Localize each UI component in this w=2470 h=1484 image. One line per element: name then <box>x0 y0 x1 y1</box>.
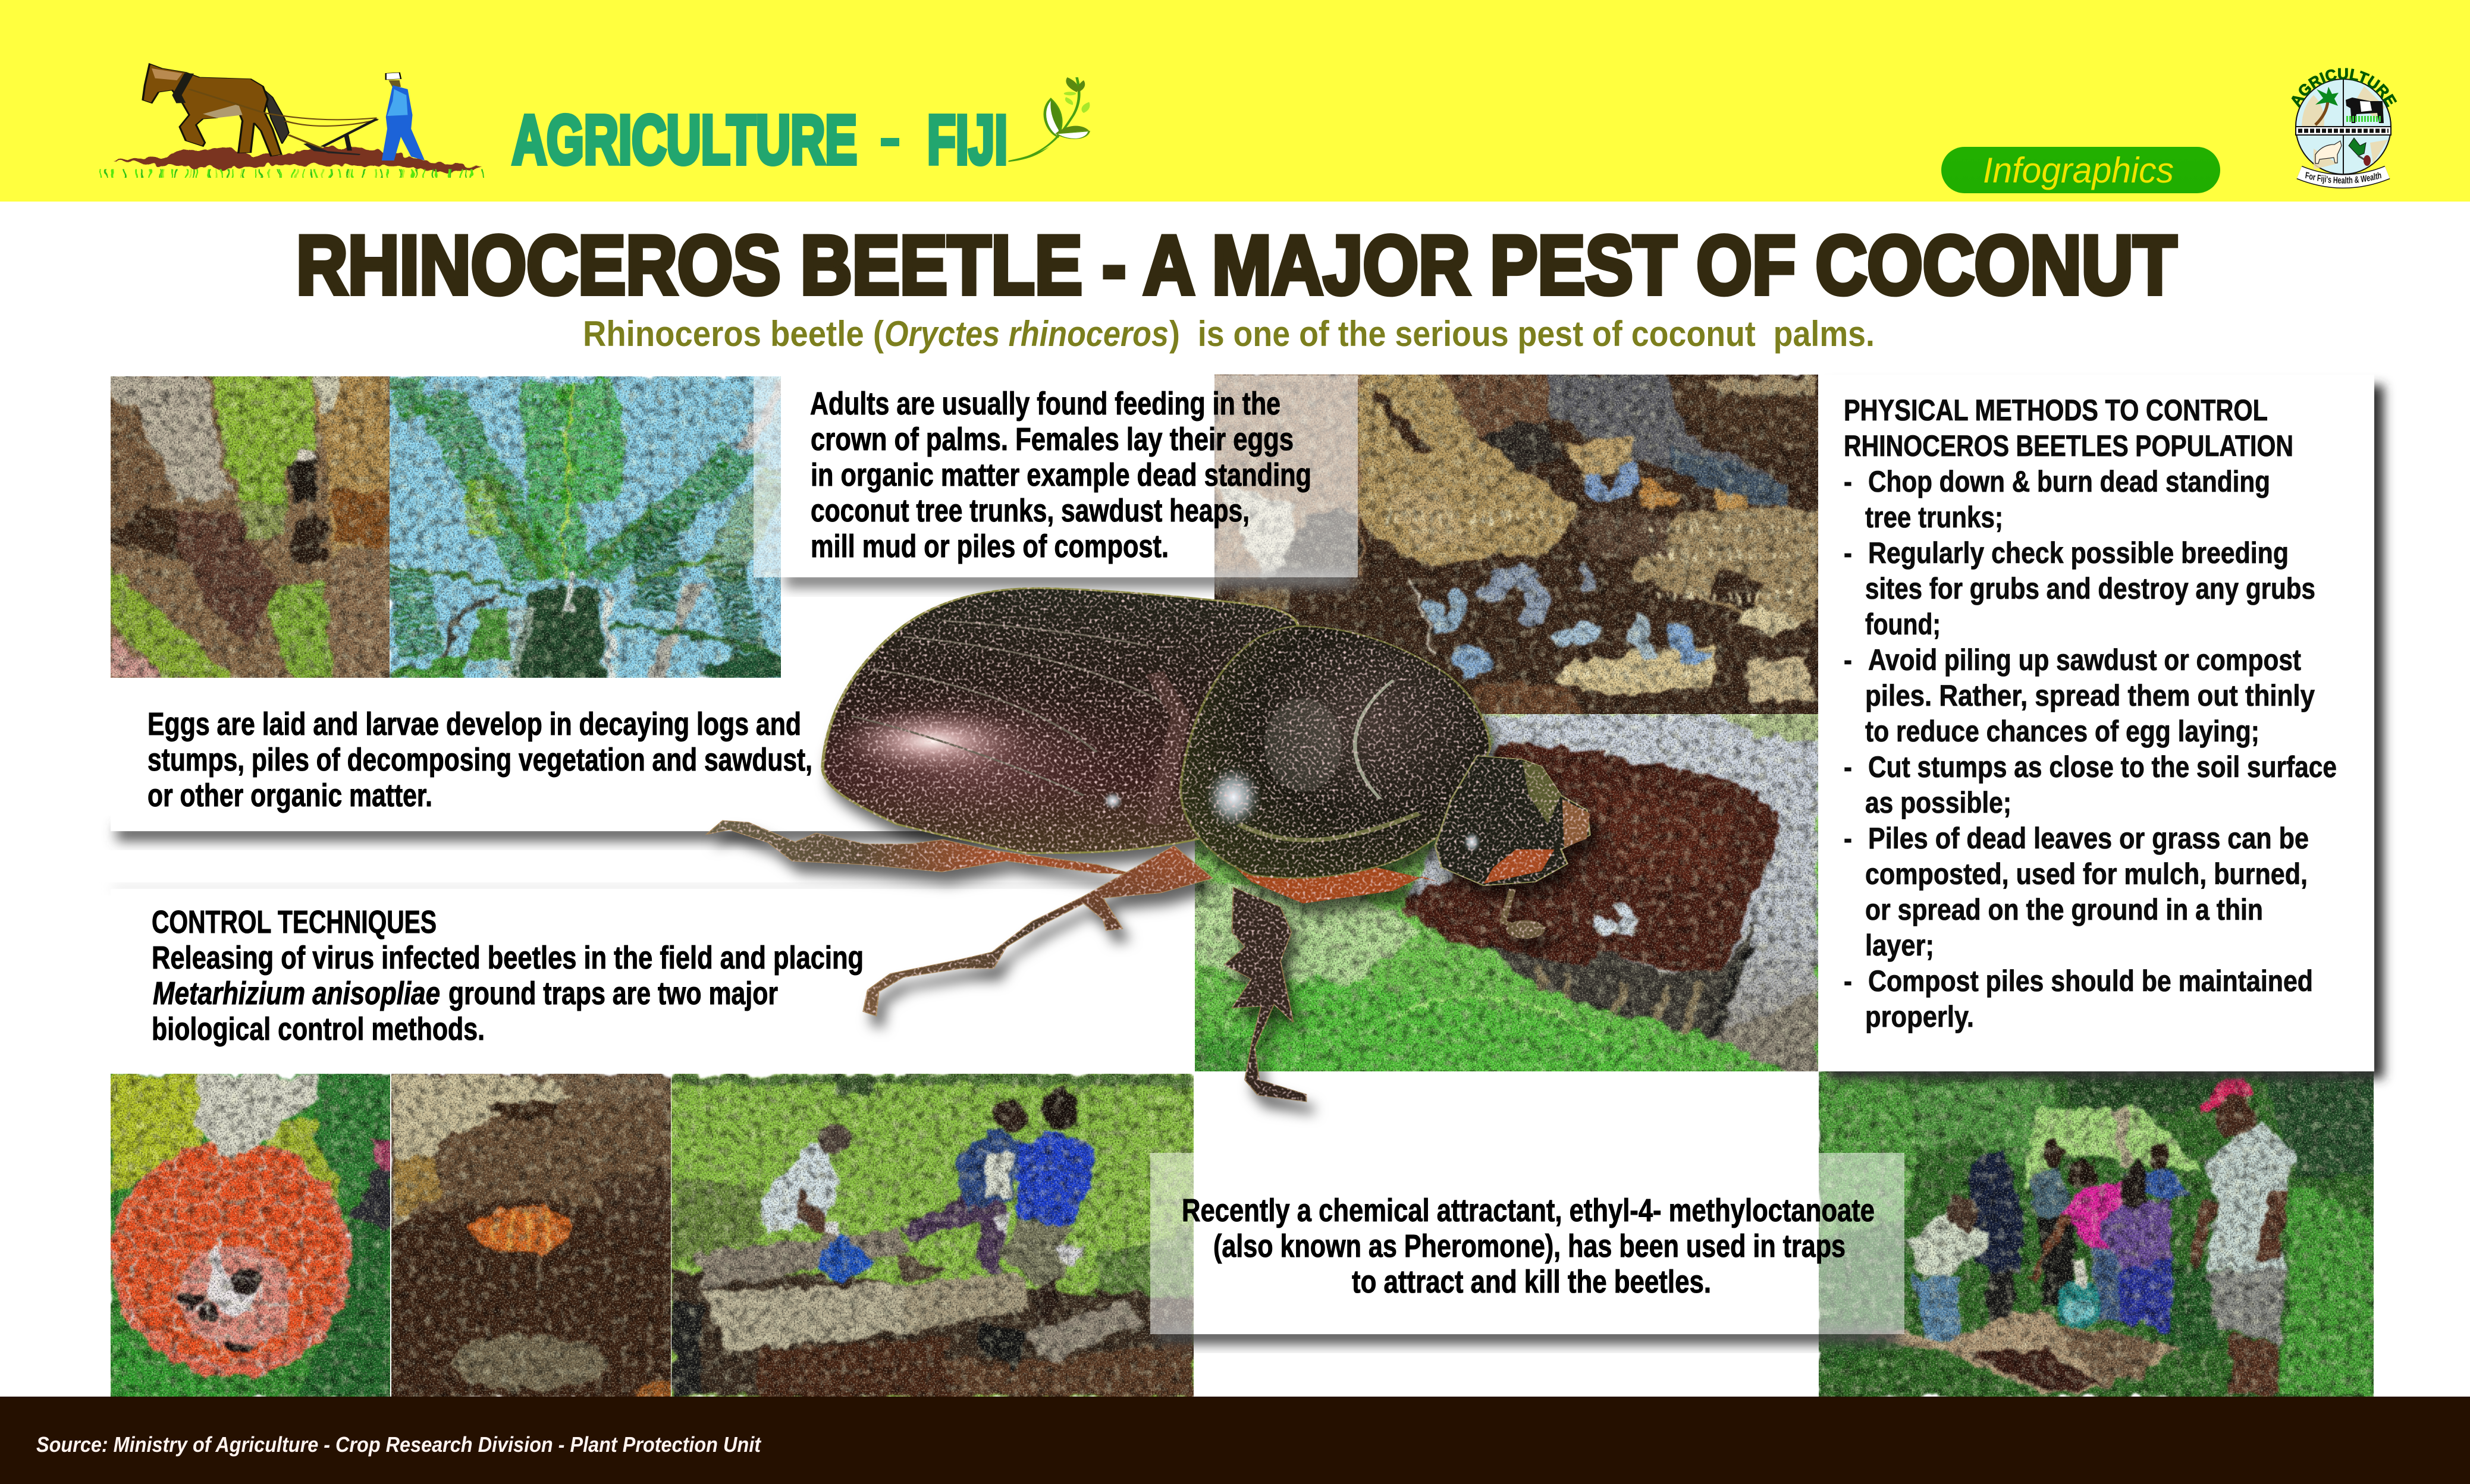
photo: coconut palm crown against sky <box>387 375 788 681</box>
photo: grubs in sawdust <box>1206 371 1832 719</box>
text block: physical methods to control population <box>1844 394 2337 1033</box>
text block: physical methods to control population: Compost piles should be maintained <box>1868 964 2313 998</box>
emblem taro plant <box>2349 138 2371 166</box>
logo: horse and ploughman illustration <box>101 64 493 177</box>
beetle front leg <box>1225 887 1306 1102</box>
text block: physical methods to control population: Chop down & burn dead standing <box>1868 465 2270 498</box>
beetle head <box>1435 756 1590 885</box>
text box: adults feeding and egg laying: in organic matter example dead standing <box>811 457 1311 493</box>
beetle pronotum <box>1181 626 1490 878</box>
text block: physical methods to control population: PHYSICAL METHODS TO CONTROL <box>1844 394 2268 427</box>
text box: control techniques: CONTROL TECHNIQUES <box>152 904 437 940</box>
text block: physical methods to control population: or spread on the ground in a thin <box>1865 893 2263 926</box>
text block: physical methods to control population: - <box>1844 964 1852 998</box>
text block: physical methods to control population: - <box>1844 643 1852 677</box>
text block: physical methods to control population: - <box>1844 750 1852 784</box>
text box: adults feeding and egg laying: crown of palms. Females lay their eggs <box>811 422 1294 457</box>
icon: leaf sprig <box>1009 77 1090 162</box>
subtitle: ) is one of the serious pest of coconut palms. <box>1169 314 1875 354</box>
text box: eggs and larvae habitat: stumps, piles of decomposing vegetation and sawdust, <box>147 742 812 778</box>
shadow and white panel: physical methods <box>1819 375 2384 1079</box>
emblem palm <box>2315 87 2339 125</box>
subtitle <box>583 314 1875 354</box>
text box: pheromone attractant: Recently a chemical attractant, ethyl-4- methyloctanoate <box>1182 1193 1875 1228</box>
text box: adults feeding and egg laying <box>754 375 1358 587</box>
text block: physical methods to control population: piles. Rather, spread them out thinly <box>1865 679 2315 712</box>
footer bar <box>0 1397 2470 1484</box>
photo: damaged coconut frond <box>111 376 390 678</box>
beetle hind leg <box>707 820 1135 875</box>
text box: eggs and larvae habitat <box>111 680 1074 841</box>
rhinoceros beetle <box>707 588 1590 1102</box>
text box: control techniques: biological control methods. <box>152 1011 485 1047</box>
text block: physical methods to control population: Avoid piling up sawdust or compost <box>1868 643 2301 677</box>
text box: control techniques: Metarhizium anisopliae <box>153 976 440 1011</box>
source text: Source: Ministry of Agriculture - Crop Research Division - Plant Protection Unit <box>36 1432 762 1457</box>
subtitle: Oryctes rhinoceros <box>884 314 1169 354</box>
text box: pheromone attractant: (also known as Pheromone), has been used in traps <box>1213 1228 1846 1264</box>
text box: adults feeding and egg laying: mill mud or piles of compost. <box>811 529 1169 564</box>
emblem: Ministry of Agriculture crest <box>2291 68 2397 188</box>
text box: control techniques: ground traps are two major <box>448 976 778 1011</box>
photo: hollow log with grub on grass <box>1189 711 1826 1077</box>
text box: control techniques <box>111 886 1194 1074</box>
infographics pill badge: Infographics <box>1983 150 2174 190</box>
text block: physical methods to control population: - <box>1844 465 1852 498</box>
text block: physical methods to control population: composted, used for mulch, burned, <box>1865 857 2308 891</box>
text box: control techniques: Releasing of virus infected beetles in the field and placing <box>152 940 864 976</box>
text block: physical methods to control population: as possible; <box>1865 786 2011 819</box>
emblem ribbon motto: For Fiji's Health & Wealth <box>2305 172 2381 184</box>
text block: physical methods to control population: to reduce chances of egg laying; <box>1865 715 2259 748</box>
brand name: AGRICULTURE - FIJI: AGRICULTURE <box>512 101 857 178</box>
text box: eggs and larvae habitat: Eggs are laid and larvae develop in decaying logs and <box>147 706 801 742</box>
text block: physical methods to control population: layer; <box>1865 929 1934 962</box>
infographics pill badge <box>1941 147 2220 193</box>
title: RHINOCEROS BEETLE - A MAJOR PEST OF COCONUT <box>296 218 2177 312</box>
emblem arc title: AGRICULTURE <box>2291 68 2397 108</box>
beetle antenna <box>1503 889 1545 929</box>
text box: eggs and larvae habitat: or other organic matter. <box>147 778 432 813</box>
text block: physical methods to control population: Piles of dead leaves or grass can be <box>1868 822 2309 855</box>
text block: physical methods to control population: Cut stumps as close to the soil surface <box>1868 750 2337 784</box>
text block: physical methods to control population: - <box>1844 822 1852 855</box>
emblem sheep <box>2315 141 2342 164</box>
header band <box>0 0 2470 202</box>
text block: physical methods to control population: properly. <box>1865 1000 1974 1033</box>
text block: physical methods to control population: found; <box>1865 608 1941 641</box>
photo: officers pouring attractant into log <box>1816 1070 2378 1400</box>
text box: pheromone attractant <box>1150 1153 1904 1344</box>
text block: physical methods to control population: tree trunks; <box>1865 501 2003 534</box>
text box: pheromone attractant: to attract and kill the beetles. <box>1352 1264 1711 1300</box>
photo: orange beetle pupa on soil <box>388 1073 677 1400</box>
text box: adults feeding and egg laying: Adults are usually found feeding in the <box>810 386 1280 422</box>
beetle elytra <box>823 588 1298 853</box>
photo: team preparing log trap in field <box>666 1073 1199 1400</box>
subtitle: Rhinoceros beetle ( <box>583 314 884 354</box>
emblem cow <box>2346 98 2384 123</box>
photo: infected beetles in red basin <box>107 1073 396 1400</box>
brand name: AGRICULTURE - FIJI: FIJI <box>927 101 1008 178</box>
text block: physical methods to control population: - <box>1844 536 1852 570</box>
beetle thorax rim <box>1194 817 1439 904</box>
text block: physical methods to control population: Regularly check possible breeding <box>1868 536 2289 570</box>
text block: physical methods to control population: sites for grubs and destroy any grubs <box>1865 572 2315 605</box>
text box: adults feeding and egg laying: coconut tree trunks, sawdust heaps, <box>811 493 1250 529</box>
beetle middle leg <box>863 846 1213 1016</box>
text block: physical methods to control population: RHINOCEROS BEETLES POPULATION <box>1844 429 2293 463</box>
